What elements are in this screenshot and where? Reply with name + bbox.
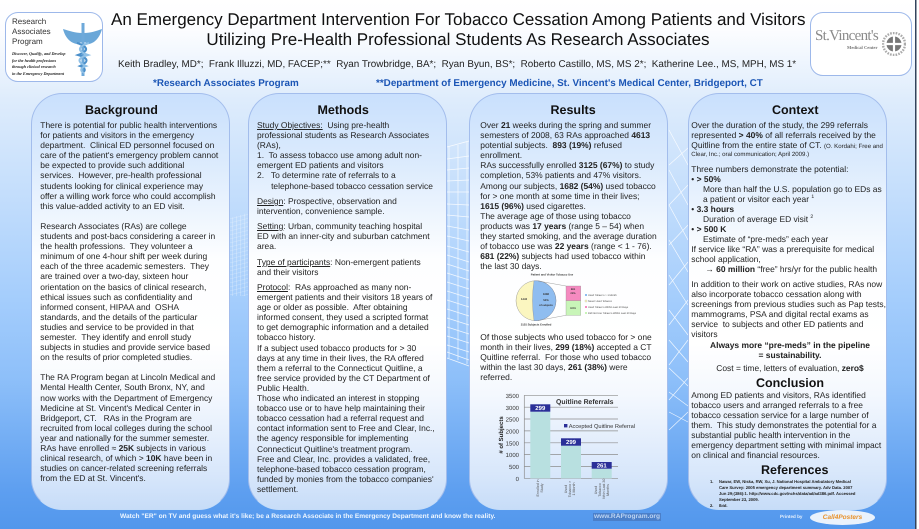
bar chart: quitline referrals: 299 — [535, 405, 546, 412]
pie chart: 54% — [543, 298, 549, 302]
bar chart: quitline referrals: 2000 — [506, 428, 520, 436]
three numbers list: Three numbers demonstrate the potential: • > 50% More than half the U.S. population go to EDs as a patient or visitor each year 1 • 3.3 hours Duration of average ED visit 2 • > 500 K Estimate of “pre-meds” each year If service like “RA” was a prerequisite for medical school application, → 60 million “free” hrs/yr for the public health — [691, 164, 882, 274]
bar chart: quitline referrals: 3000 — [506, 405, 520, 412]
results follow-up text: Of those subjects who used tobacco for > one month in their lives, 299 (18%) accepted a CT Quitline referral. For those who used tobacco within the last 30 days, 261 (38%) were referred. — [480, 332, 652, 382]
logo tagline: Discover, Qualify, and Develop for the health professions through clinical research in the Emergency Department — [12, 51, 65, 76]
footer tagline: Watch "ER" on TV and guess what it's like; be a Research Associate in the Emergency Department and know the reality. — [120, 513, 495, 520]
protocol: Protocol: RAs approached as many non- emergent patients and their visitors 18 years of age or older as possible. After obtaining informed consent, they used a scripted format to get demographic information and a detailed tobacco history. If a subject used tobacco products for > 30 days at any time in their lives, the RA offered them a referral to the Connecticut Quitline, a free service provided by the CT Department of Public Health. Those who indicated an interest in stopping tobacco use or to have help maintaining their tobacco cessation had a referral request and contact information sent to Free and Clear, Inc., the agency responsible for implementing Connecticut Quitline's treatment program. Free and Clear, Inc. provides a validated, free, telephone-based tobacco cessation program, funded by monies from the tobacco companies' settlement. — [257, 282, 435, 494]
panel: background — [31, 93, 230, 510]
printed by label: Printed by — [780, 514, 802, 519]
panel: results — [469, 93, 668, 510]
pie chart — [516, 272, 637, 326]
references list: Nawar, EW, Niska, RW, Xu, J. National Hospital Ambulatory Medical Care Survey: 2005 emergency department summary. Adv Data. 2007 Jun 29;(386):1. http://www.cdc.gov/nchs/data/ad/ad386.pdf. Accessed September 23, 2009. Ibid. — [719, 479, 855, 508]
bar chart: quitline referrals: Enrolled in — [536, 480, 540, 496]
bar chart: quitline referrals: Used — [564, 485, 568, 493]
pie chart: 1443 — [521, 297, 528, 301]
pie chart: of subjects — [539, 304, 553, 307]
bar chart: quitline referrals: 261 — [597, 463, 607, 470]
sustainability statement: Always more “pre-meds” in the pipeline = sustainability. — [710, 340, 870, 360]
logo text: Research Associates Program — [12, 16, 51, 46]
title — [111, 10, 806, 49]
bar chart: quitline referrals — [498, 393, 635, 499]
logo: St. Vincent's Medical Center — [810, 12, 912, 76]
cost statement: Cost = time, letters of evaluation, zero$ — [716, 362, 864, 372]
pie chart: 1682 — [543, 292, 550, 296]
pie chart: Patient and Visitor Tobacco Use — [531, 272, 574, 276]
icon: seal — [882, 32, 906, 56]
bar chart: quitline referrals: 299 — [566, 439, 577, 446]
design: Design: Prospective, observation and intervention, convenience sample. — [257, 196, 397, 216]
bar chart: quitline referrals: Tobacco > — [568, 481, 572, 497]
heading: methods: Methods — [318, 103, 369, 117]
study objectives: Study Objectives: Using pre-health professional students as Research Associates (RAs), 1. To assess tobacco use among adult non- emergent ED patients and visitors 2. To determine rate of referrals to a telephone-based tobacco cessation service — [257, 120, 433, 191]
bar chart: quitline referrals: 1 Month — [572, 482, 576, 496]
logo: Research Associates Program — [5, 12, 103, 82]
logo: Call4Posters: Call4Posters — [823, 514, 862, 521]
bar chart: quitline referrals: Tobacco — [598, 483, 602, 497]
setting: Setting: Urban, community teaching hospital ED with an inner-city and suburban catchment area. — [257, 221, 430, 251]
other activities text: In addition to their work on active studies, RAs now also incorporate tobacco cessation along with screenings from previous studies such as Pap tests, mammograms, PSA and digital rectal exams as service to subjects and other ED patients and visitors — [691, 278, 886, 339]
pie chart: 22% — [570, 292, 576, 295]
title: An Emergency Department Intervention For Tobacco Cessation Among Patients and Visitors — [111, 10, 806, 29]
logo: Call4Posters — [810, 510, 875, 525]
type of participants: Type of participants: Non-emergent patients and their visitors — [257, 257, 421, 277]
context intro: Over the duration of the study, the 299 referrals represented > 40% of all referrals received by the Quitline from the entire state of CT. (O. Kordahi; Free and — [691, 120, 883, 150]
pie chart: Never Used Tobacco — [588, 300, 613, 303]
conclusion text: Among ED patients and visitors, RAs identified tobacco users and arranged referrals to a free tobacco cessation service for a large number of them. This study demonstrates the potential for a substantial public health intervention in the emergency department setting with minimal impact on clinical and financial resources. — [691, 390, 881, 460]
bar chart: quitline referrals: Months — [606, 484, 610, 496]
affiliation: research associates program: *Research Associates Program — [153, 78, 299, 88]
heading: background: Background — [85, 103, 158, 117]
footer website: www.RAProgram.org — [594, 513, 660, 520]
pie chart: Did Not Use Tobacco Within Last 30 Days — [588, 312, 637, 315]
logo wordmark: St.Vincent's — [815, 28, 878, 44]
results text: Over 21 weeks during the spring and summer semesters of 2008, 63 RAs approached 4613 potential subjects. 893 (19%) refused enrollment. RAs successfully enrolled 3125 (67%) to study completion, 53% patients and 47% visitors. Among our subjects, 1682 (54%) used tobacco for > one month at some time in their lives; 1615 (96%) used cigarettes. The average age of those using tobacco products was 17 years (range 5 – 54) when they started smoking, and the average duration of tobacco use was 22 years (range < 1 - 76). 681 (22%) subjects had used tobacco within the last 30 days. — [480, 120, 657, 271]
pie chart: Used Tobacco Within Last 30 Days — [588, 306, 629, 309]
pie chart: 3125 Subjects Enrolled — [521, 322, 552, 326]
heading: results: Results — [550, 103, 596, 117]
bar chart: quitline referrals: Quitline Referrals — [556, 399, 614, 406]
heading: conclusion: Conclusion — [756, 376, 824, 390]
bar chart: quitline referrals: 0 — [516, 476, 520, 483]
panel: context — [688, 93, 887, 510]
bar chart: quitline referrals: Accepted Quitline Referral — [569, 423, 635, 430]
panel: methods — [248, 93, 446, 510]
bar chart: quitline referrals: 1000 — [506, 452, 520, 459]
icon: caduceus — [63, 23, 102, 76]
pie chart: Used Tobacco > 1 Month — [588, 294, 617, 297]
bar chart: quitline referrals: 500 — [509, 464, 520, 471]
affiliation: department of emergency medicine: **Department of Emergency Medicine, St. Vincent's Medical Center, Bridgeport, CT — [376, 78, 763, 88]
bar chart: quitline referrals: 3500 — [506, 393, 520, 400]
pie chart: 681 — [571, 288, 576, 291]
title: Utilizing Pre-Health Professional Students As Research Associates — [206, 30, 710, 49]
pie chart: 1001 — [570, 307, 576, 310]
bar chart: quitline referrals: 2500 — [506, 417, 520, 424]
bar chart: quitline referrals: Study — [540, 483, 544, 493]
heading: references: References — [761, 462, 828, 476]
heading: context: Context — [772, 103, 819, 117]
references numbers: 1. 2. — [710, 479, 713, 508]
logo subtitle: Medical Center — [847, 44, 878, 50]
bar chart: quitline referrals: # of Subjects — [498, 416, 505, 454]
bar chart: quitline referrals: 1500 — [506, 440, 520, 447]
citation continuation: Clear, Inc.; oral communication; April 2009.) — [691, 150, 809, 158]
bar chart: quitline referrals: Used — [594, 486, 598, 494]
authors: Keith Bradley, MD*; Frank Illuzzi, MD, FACEP;** Ryan Trowbridge, BA*; Ryan Byun, BS*; Roberto Castillo, MS, MS 2*; Katherine Lee., MS, MPH, MS 1* — [118, 59, 796, 70]
background text: There is potential for public health interventions for patients and visitors in the emergency department. Clinical ED personnel focused on care of the patient's emergency problem cannot be expected to provide such additional services. However, pre-health professional students looking for clinical experience may offer a willing work force who could accomplish this value-added activity to an ED visit. Research Associates (RAs) are college students and post-bacs considering a career in the health professions. They volunteer a minimum of one 4-hour shift per week during each of the three academic semesters. They are trained over a two-day, sixteen hour orientation on the basics of clinical research, ethical issues such as confidentiality and informed consent, HIPAA and OSHA standards, and the details of the particular studies and service to be provided in that semester. They identify and enroll study subjects in studies and provide service based on the results of prior completed studies. The RA Program began at Lincoln Medical and Mental Health Center, South Bronx, NY, and now works with the Department of Emergency Medicine at St. Vincent's Medical Center in Bridgeport, CT. RAs in the Program are recruited from local colleges during the school year and nationally for the summer semester. RAs have enrolled ≈ 25K subjects in various clinical research, of which > 10K have been in studies on cancer-related screening referrals from the ED at St. Vincent's. — [40, 120, 218, 483]
